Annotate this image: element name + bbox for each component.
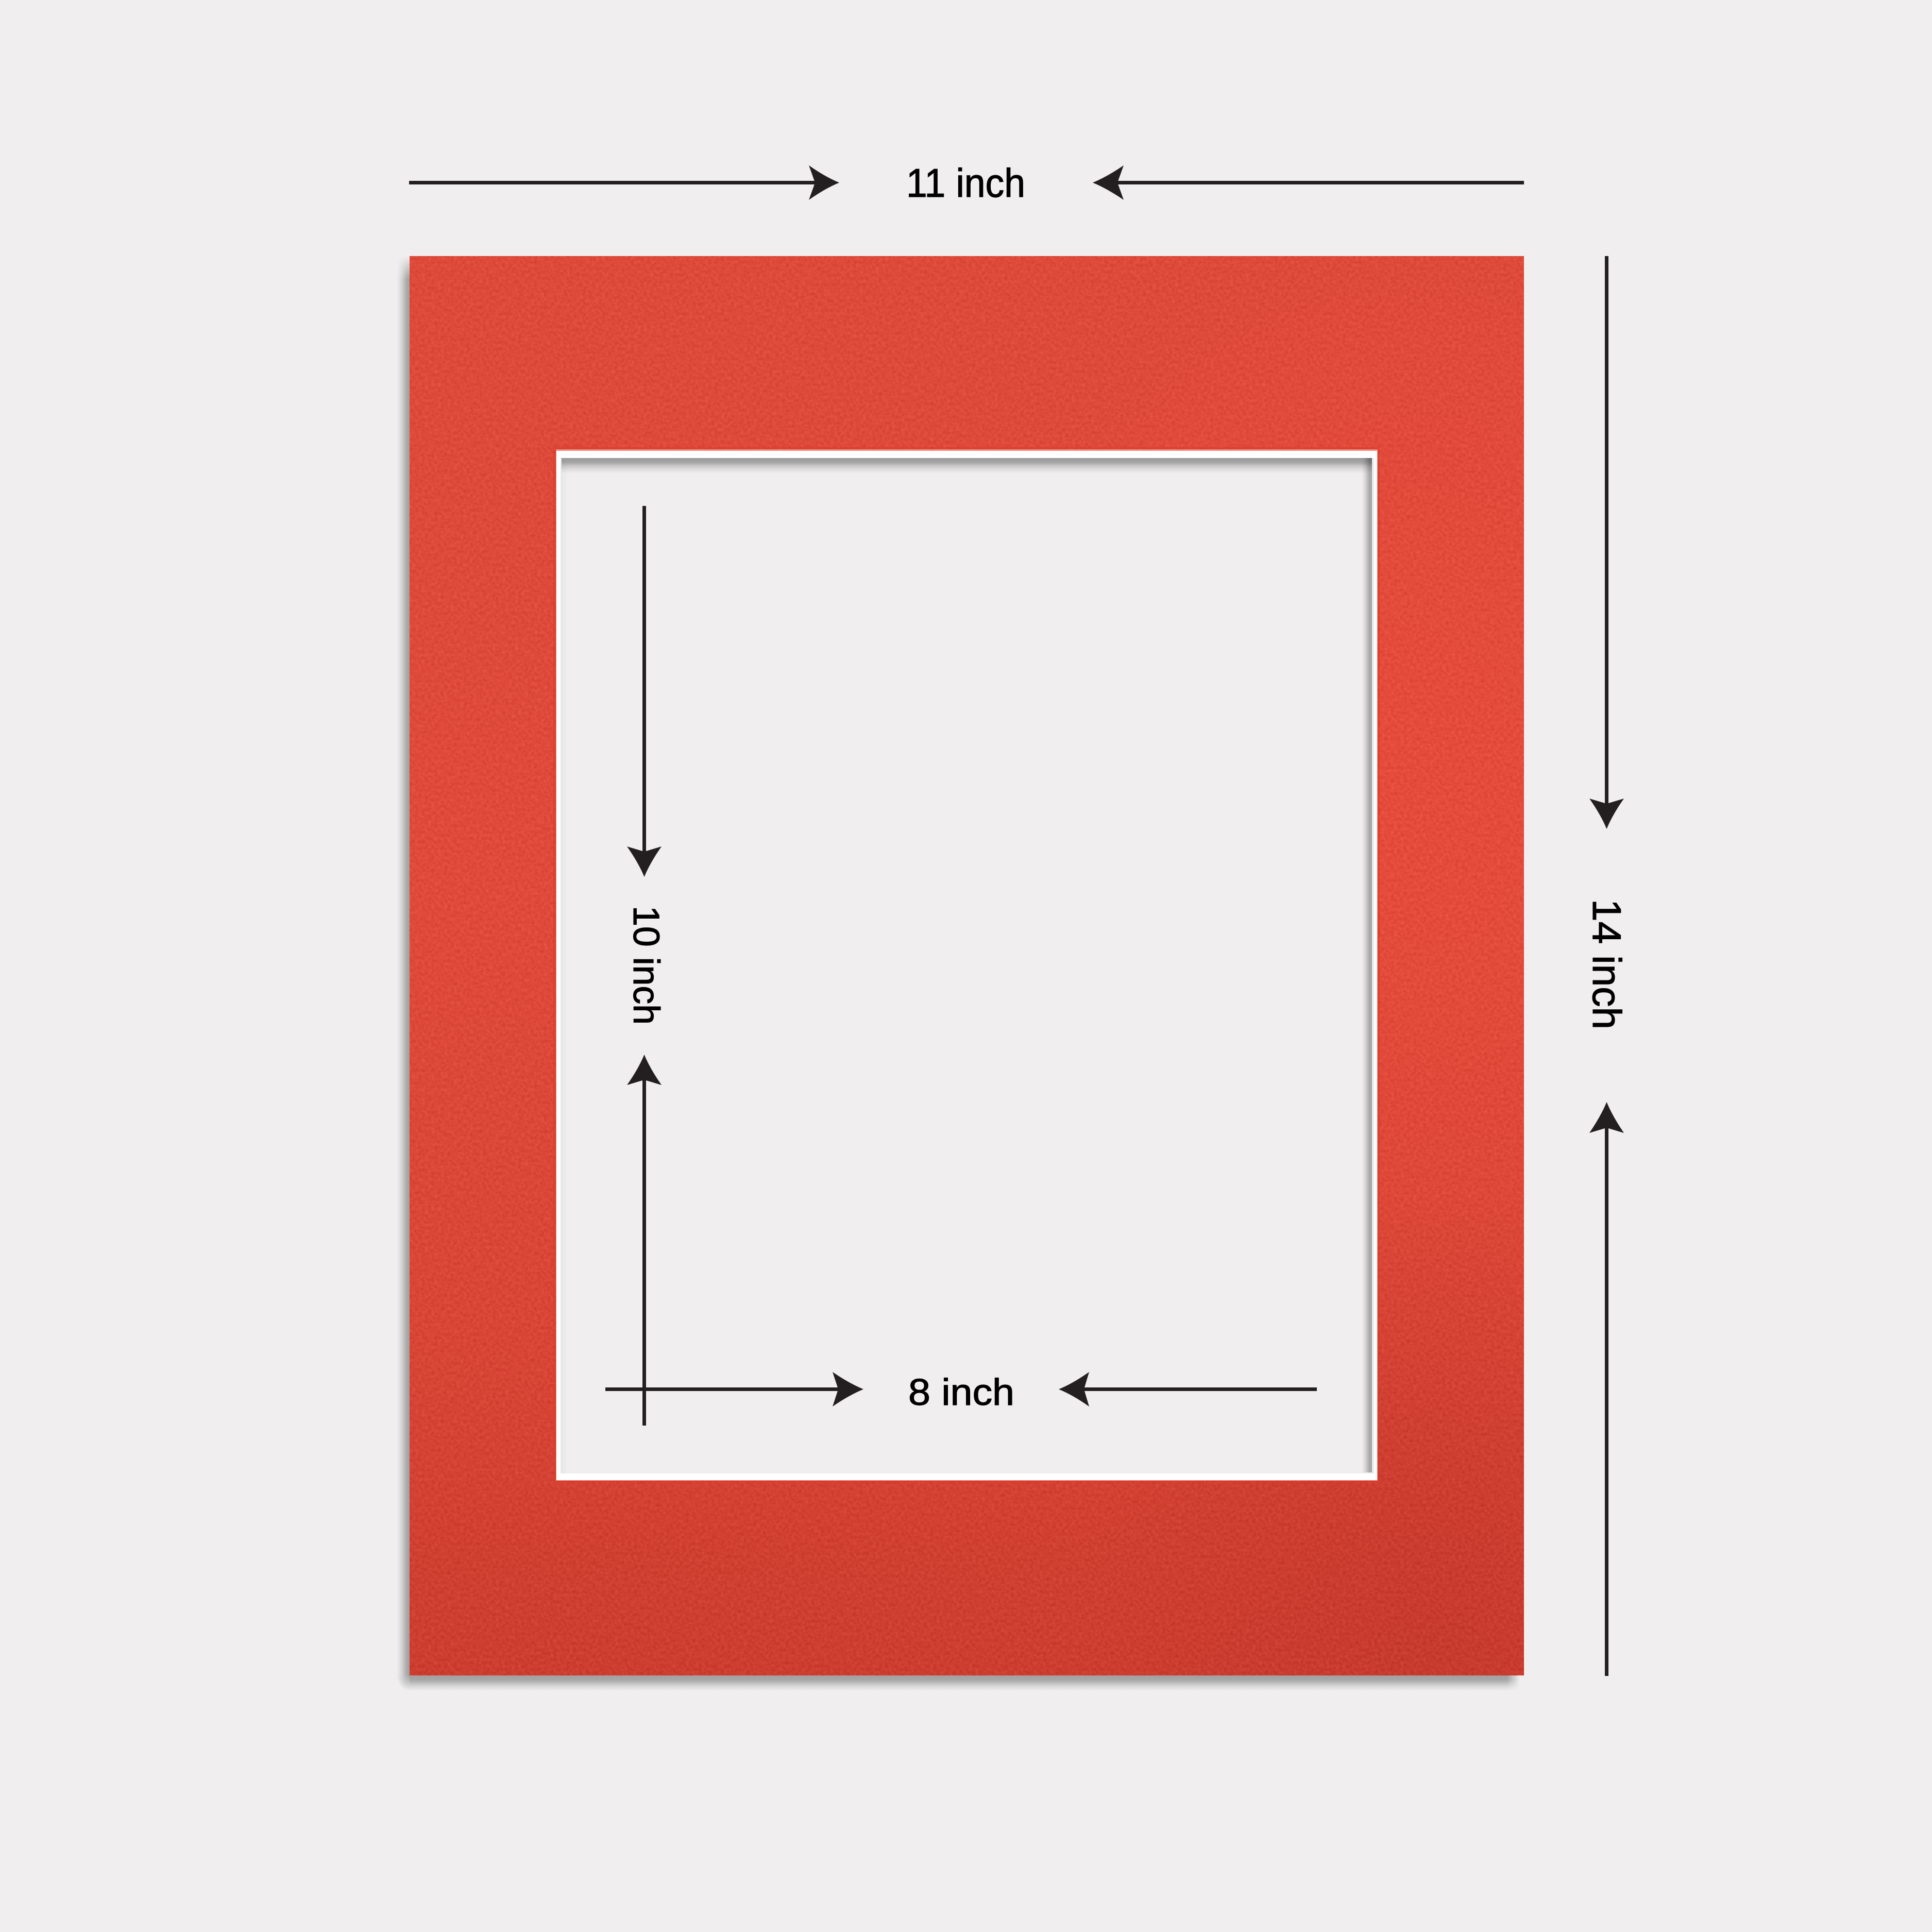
mat board: red frame bbox=[394, 256, 1524, 1691]
dimension: 10 inch window height bbox=[625, 506, 666, 1426]
arrow: 10 inch bottom bbox=[627, 1055, 662, 1426]
arrow: 8 inch left bbox=[605, 1372, 863, 1406]
mat drop shadow bbox=[394, 256, 1520, 1691]
dimension: 11 inch width bbox=[409, 160, 1524, 206]
arrow: 11 inch right bbox=[1093, 165, 1524, 200]
arrow: 14 inch top bbox=[1589, 256, 1624, 829]
mat surface bbox=[410, 256, 1524, 1675]
arrow: 14 inch bottom bbox=[1589, 1102, 1624, 1676]
arrow: 8 inch right bbox=[1059, 1372, 1317, 1406]
arrow: 11 inch left bbox=[409, 165, 839, 200]
dimension: 14 inch height bbox=[1584, 256, 1630, 1676]
label: 14 inch: 14 inch bbox=[1584, 899, 1630, 1029]
window opening with white bevel bbox=[553, 447, 1380, 1483]
label: 10 inch: 10 inch bbox=[625, 906, 666, 1025]
label: 8 inch: 8 inch bbox=[908, 1372, 1014, 1413]
arrow: 10 inch top bbox=[627, 506, 662, 877]
dimension: 8 inch window width bbox=[605, 1372, 1317, 1413]
label: 11 inch: 11 inch bbox=[906, 160, 1025, 206]
